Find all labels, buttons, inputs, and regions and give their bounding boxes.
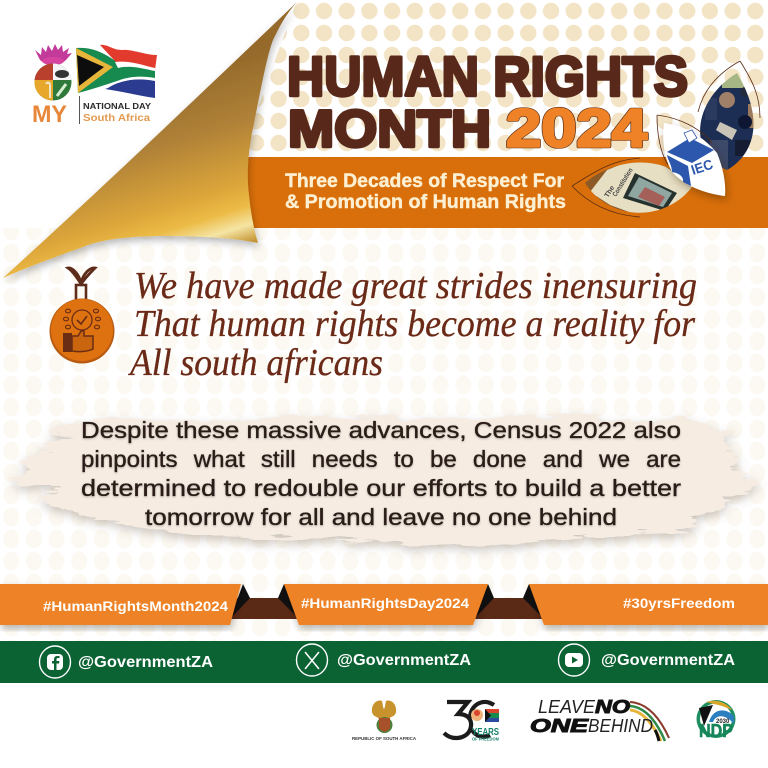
logo: My National Day (32, 44, 157, 128)
ribbon connector right (472, 584, 545, 619)
leaf: constitution book: Constitution (612, 167, 635, 198)
social media bar (0, 641, 768, 683)
subtitle text: & Promotion of Human Rights (285, 192, 566, 213)
hashtag text: #30yrsFreedom (623, 596, 735, 611)
text: no: NO (595, 697, 630, 717)
logo: coat of arms (352, 700, 416, 742)
text: X handle: @GovernmentZA (337, 652, 471, 669)
icon: South African flag (76, 45, 157, 98)
subtitle text (285, 171, 566, 213)
script heading (127, 265, 697, 384)
body line three: determined to redouble our efforts to build a better (81, 475, 681, 501)
logo: 30 years of freedom (444, 702, 499, 742)
page curl (3, 2, 297, 278)
subtitle text: Three Decades of Respect For (285, 171, 565, 192)
title line one: HUMAN RIGHTS (287, 44, 688, 108)
hashtag ribbon right (529, 584, 768, 625)
icon: X (296, 644, 328, 676)
ribbon connector left (228, 584, 300, 619)
background dots top (240, 0, 768, 157)
leaf: constitution book: The (604, 185, 616, 199)
title (287, 44, 688, 158)
script line one: We have made great strides inensuring (134, 265, 697, 307)
leaf: IEC ballot box (657, 115, 725, 196)
icon: youtube (558, 644, 590, 676)
body line two: pinpoints what still needs to be done and we are (81, 446, 681, 472)
text: one: ONE (530, 716, 589, 736)
subtitle band (240, 157, 768, 228)
text: leave: LEAVE (538, 697, 596, 717)
text: youtube handle: @GovernmentZA (601, 652, 735, 669)
script line three: All south africans (127, 342, 383, 384)
hashtag text: #HumanRightsDay2024 (301, 596, 470, 611)
logo: leave no one behind (530, 697, 669, 741)
text: years: YEARS (472, 727, 499, 738)
icon: thistle (35, 44, 72, 65)
background dots lower (0, 228, 768, 641)
text: behind: BEHIND (588, 716, 653, 736)
divider (79, 96, 80, 124)
title year: 2024 (506, 98, 647, 158)
brush stroke panel (8, 416, 762, 546)
text: 2030: 2030 (716, 719, 730, 725)
title line two: MONTH (288, 100, 491, 158)
body text (81, 417, 681, 530)
icon: medal with thumbs up (50, 268, 114, 364)
leaf: crowd photo (698, 60, 760, 170)
body line one: Despite these massive advances, Census 2022 also (81, 417, 681, 443)
leaf: IEC ballot box: IEC (689, 156, 715, 178)
leaf: constitution book (572, 158, 692, 218)
logo: NDP (696, 700, 736, 741)
body line four: tomorrow for all and leave no one behind (145, 504, 617, 530)
text: National Day: NATIONAL DAY (83, 102, 152, 111)
text: NDP: NDP (699, 721, 733, 741)
hashtag text: #HumanRightsMonth2024 (43, 599, 229, 614)
text: South Africa: South Africa (83, 113, 150, 124)
text: facebook handle: @GovernmentZA (78, 654, 213, 671)
hashtag ribbon middle (284, 584, 488, 625)
text: of freedom: OF FREEDOM (472, 736, 499, 742)
script line two: That human rights become a reality for (134, 303, 695, 345)
text: MY: MY (32, 101, 67, 128)
text: republic caption: REPUBLIC OF SOUTH AFRICA (352, 736, 416, 742)
icon: facebook (40, 646, 70, 678)
hashtag ribbon left (0, 584, 241, 625)
title year: 2024 (506, 98, 647, 158)
icon: shield (34, 63, 72, 101)
